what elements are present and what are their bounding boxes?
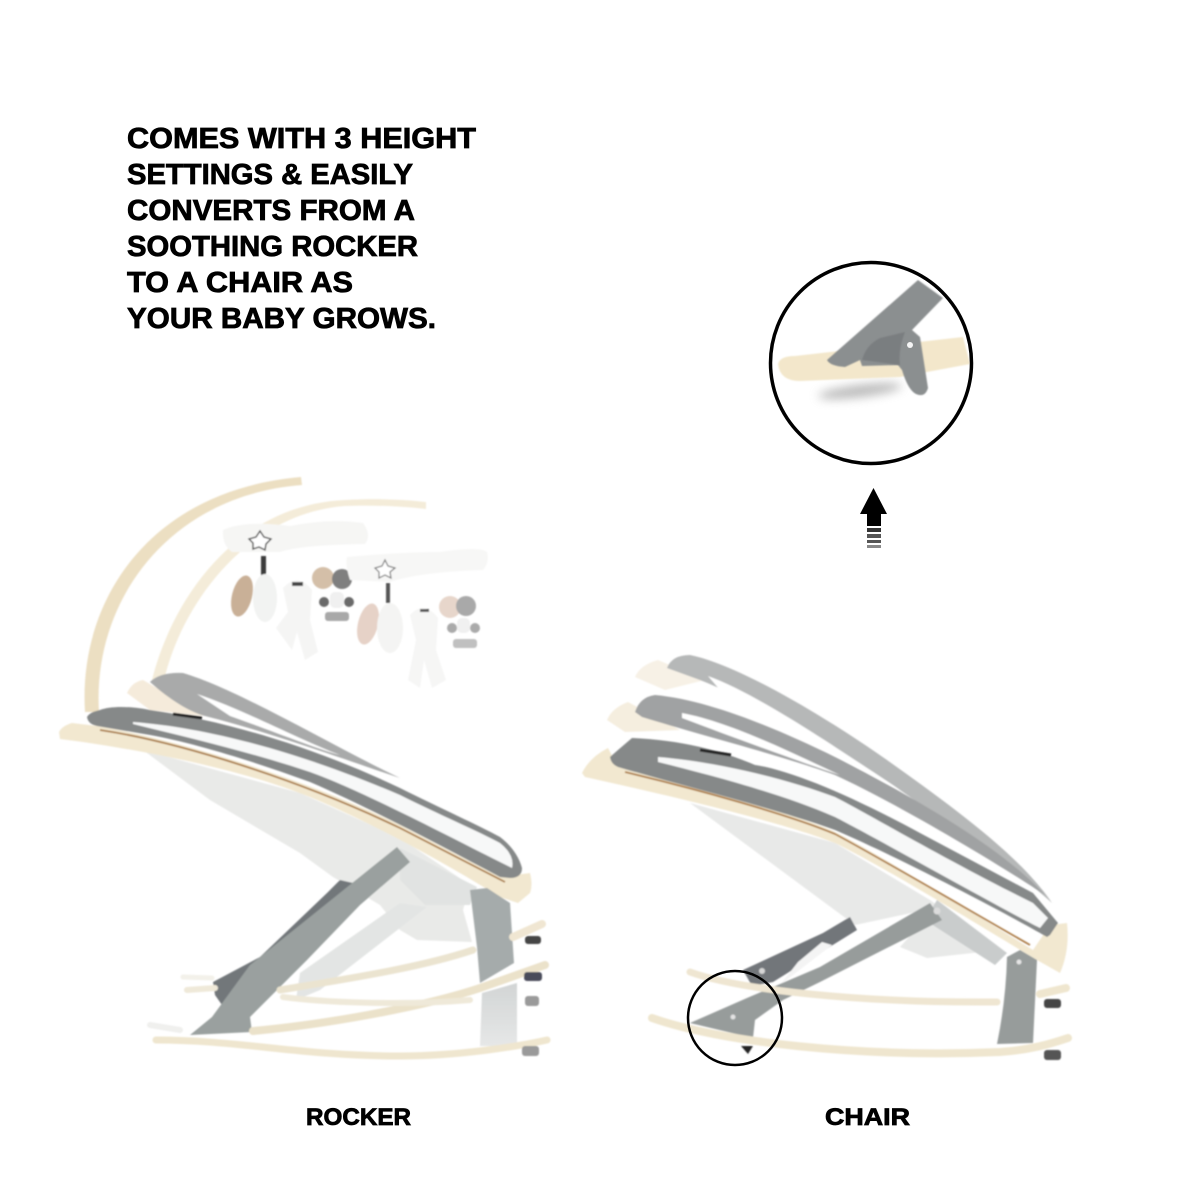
- label: chair: CHAIR: [825, 1104, 910, 1131]
- mobile arm, lower position: [85, 477, 302, 712]
- rear leg: [470, 888, 514, 983]
- highest seat ghost: [635, 655, 1052, 903]
- fabric underside of seat: [690, 803, 1000, 958]
- seat adjustment bracket: [743, 917, 857, 986]
- headline text: TO A CHAIR AS: [127, 267, 353, 299]
- highlight circle around chair latch: [688, 971, 782, 1065]
- light secondary strut: [296, 903, 427, 1000]
- wooden seat board: [59, 723, 532, 903]
- label: rocker: ROCKER: [306, 1104, 411, 1131]
- adjustment bracket: [213, 880, 353, 1005]
- raised seat ghost: [127, 673, 400, 778]
- arrow pointing up to detail circle: [860, 488, 887, 548]
- fabric underside of seat: [143, 750, 472, 942]
- wooden seat board: [582, 748, 1068, 973]
- toy mobile, first position: [223, 521, 368, 660]
- chair illustration: [582, 655, 1068, 1060]
- headline text: [127, 123, 476, 335]
- rear bar under seat: [400, 848, 477, 905]
- rocker runners: [652, 972, 1068, 1053]
- rear bar under seat: [925, 900, 1007, 965]
- folding frame strut: [190, 847, 410, 1035]
- mobile arm, raised position: [152, 499, 426, 680]
- seat pad: [610, 738, 1058, 937]
- folding frame strut: [690, 903, 942, 1038]
- rear leg: [997, 950, 1037, 1044]
- toy mobile, second position: [346, 549, 488, 688]
- rocker illustration: [59, 477, 547, 1056]
- headline text: SETTINGS & EASILY: [127, 159, 413, 191]
- headline text: CONVERTS FROM A: [127, 195, 415, 227]
- runner feet: [522, 936, 542, 1056]
- middle seat ghost: [607, 695, 1045, 895]
- rocker runners: [150, 924, 547, 1056]
- headline text: COMES WITH 3 HEIGHT: [127, 123, 476, 155]
- headline text: YOUR BABY GROWS.: [127, 303, 436, 335]
- headline text: SOOTHING ROCKER: [127, 231, 418, 263]
- magnified latch detail circle: [770, 262, 972, 464]
- seat pad: [87, 707, 522, 878]
- runner feet: [741, 999, 1061, 1060]
